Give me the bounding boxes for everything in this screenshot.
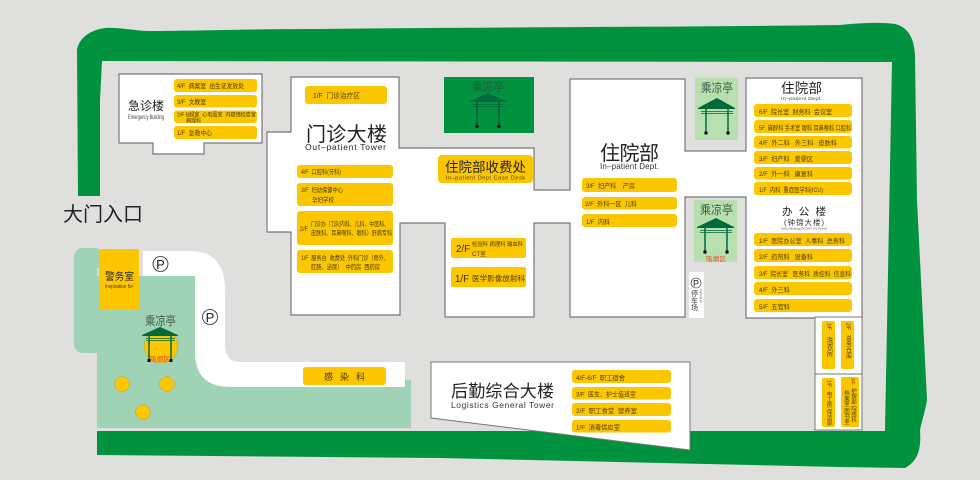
- panel: emergency building: Emergency Building: [128, 115, 164, 121]
- panel: infection department: [303, 367, 386, 385]
- lab and imaging floors: 1/F: [455, 274, 469, 285]
- panel: service rooms: 护理部 院感科: [850, 387, 857, 424]
- lab and imaging floors: 医学影像放射科: [472, 273, 526, 283]
- panel: parking sign: Parking lot: [699, 289, 703, 303]
- panel: infection department: 感 染 科: [324, 371, 365, 382]
- inpatient department: In–patient Dept.: [600, 162, 659, 171]
- outpatient tower: 肛肠、泌尿） 中药房 西药房: [311, 262, 380, 271]
- pavilion: lower light green with smoking area: 吸烟区: [706, 254, 727, 263]
- right inpatient department list: 4/F 外二科 外三科 皮肤科: [759, 138, 837, 147]
- right inpatient department list: [754, 81, 852, 195]
- panel: logistics general tower: 4/F-6/F 职工宿舍: [576, 373, 625, 382]
- office building list: 5/F 五官科: [759, 302, 790, 311]
- office building list: Office Building(ZHONG JIN Tower): [781, 226, 827, 230]
- panel: service rooms: 2/F: [844, 323, 850, 330]
- right inpatient department list: 6/F 院长室 财务科 会议室: [759, 107, 832, 116]
- outpatient tower: 3/F 妇幼保健中心: [301, 185, 343, 194]
- panel: service rooms: [815, 317, 862, 430]
- panel: logistics general tower: 后勤综合大楼: [451, 382, 554, 401]
- panel: parking sign: 停车场: [690, 289, 698, 312]
- right inpatient department list: 1/F 内科 重症医学科(ICU): [759, 185, 823, 194]
- panel: logistics general tower: 2/F 职工食堂 营养室: [576, 406, 637, 415]
- inpatient department: 住院部: [600, 142, 659, 165]
- lawn pavilion with smoking area: 乘凉亭: [145, 313, 176, 328]
- panel: parking sign: [689, 272, 704, 318]
- outpatient tower: [297, 86, 393, 273]
- right inpatient department list: 住院部: [781, 81, 822, 96]
- lab and imaging floors: 2/F: [456, 244, 470, 255]
- pavilion: dark green: [444, 77, 534, 133]
- office building list: 1/F 医院办公室 人事科 总务科: [759, 236, 845, 245]
- outpatient tower: 1/F 门诊治疗区: [313, 91, 360, 100]
- panel: emergency building: [119, 74, 262, 154]
- pavilion: lower light green with smoking area: [694, 200, 737, 263]
- panel: service rooms: 3/F: [850, 378, 856, 385]
- panel: logistics general tower: Logistics General Tower: [451, 400, 554, 410]
- office building list: 2/F 药剂科 设备科: [759, 252, 813, 261]
- heading: main entrance: 大门入口: [63, 203, 143, 226]
- outpatient tower: 4/F 口腔科(牙科): [301, 167, 341, 176]
- lawn circle 3: [136, 404, 150, 420]
- office building list: [754, 205, 852, 312]
- inpatient cashier desk: In–patient Dept Case Desk: [446, 176, 525, 182]
- panel: guard room: 警务室: [105, 270, 134, 283]
- lawn pavilion with smoking area: 吸烟区: [150, 354, 171, 363]
- outpatient tower: 2/F: [300, 227, 308, 233]
- inpatient department: 1/F 内科: [586, 217, 610, 226]
- panel: emergency building: 4/F 病案室 出生证发放处: [177, 81, 244, 90]
- pavilion: upper light green: [695, 78, 738, 140]
- outpatient tower: 1/F 服务台 收费处 外科门诊（骨外、: [301, 253, 389, 262]
- right inpatient department list: 3/F 妇产科 爱婴区: [759, 154, 813, 163]
- panel: emergency building: 3/F 文教室: [177, 97, 206, 106]
- outpatient tower: 孕妇学校: [312, 195, 334, 204]
- icon: parking 1: P: [156, 257, 165, 272]
- lab and imaging floors: [451, 238, 526, 287]
- pavilion: lower light green with smoking area: 乘凉亭: [700, 202, 733, 217]
- office building list: 4/F 外三科: [759, 285, 790, 294]
- icon: parking 2: [202, 310, 218, 325]
- panel: logistics general tower: [431, 362, 690, 450]
- panel: emergency building: 病理科: [186, 116, 201, 124]
- panel: main hospital building outline: [267, 77, 862, 318]
- outpatient tower: Out–patient Tower: [305, 142, 386, 152]
- panel: emergency building: 急诊楼: [128, 98, 164, 113]
- outpatient tower: 门诊大楼: [306, 123, 387, 146]
- inpatient department: 3/F 妇产科 产房: [586, 181, 635, 190]
- outpatient tower: 皮肤科、耳鼻喉科、眼科）肝病专科: [311, 228, 392, 237]
- panel: emergency building: 1/F 急救中心: [177, 128, 212, 137]
- panel: service rooms: 1/F: [826, 380, 832, 387]
- pavilion: upper light green: 乘凉亭: [701, 80, 733, 95]
- panel: parking sign: P: [693, 278, 699, 288]
- lab and imaging floors: CT室: [472, 250, 486, 258]
- panel: service rooms: 总务仓库: [844, 334, 852, 360]
- inpatient department: [582, 142, 677, 227]
- right inpatient department list: 2/F 外一科 康复科: [759, 169, 813, 178]
- panel: emergency building: 2/F B超室 心电图室 内窥镜检查室: [177, 110, 256, 118]
- panel: service rooms: 电工房 保洁部: [826, 390, 832, 427]
- campus road: [143, 251, 405, 387]
- inpatient cashier desk: [438, 155, 533, 183]
- panel: service rooms: 档案室 图书室: [843, 389, 850, 425]
- panel: service rooms: 洗衣房: [825, 336, 833, 358]
- panel: logistics general tower: 3/F 医生、护士值班室: [576, 390, 636, 398]
- office building list: 办 公 楼: [782, 205, 826, 218]
- inpatient department: 2/F 外科一区 儿科: [585, 199, 637, 208]
- right inpatient department list: In–patient Dept.: [781, 96, 822, 101]
- lawn circle 2: [160, 376, 174, 392]
- office building list: 3/F 院长室 医务科 质控科 信息科: [759, 269, 851, 278]
- lawn circle 1: [114, 376, 130, 392]
- lab and imaging floors: 检验科 病理科 输血科: [472, 240, 523, 248]
- icon: parking 2: P: [206, 310, 214, 325]
- lawn below road: [97, 276, 411, 428]
- outpatient tower: 门诊办 门诊(内科、儿科、中医科、: [311, 219, 389, 228]
- lawn area: [74, 248, 411, 428]
- right inpatient department list: 5F 麻醉科 手术室 眼科 耳鼻喉科 口腔科: [759, 123, 851, 132]
- pavilion: dark green: 乘凉亭: [472, 79, 504, 94]
- lawn pavilion with smoking area: [142, 313, 178, 363]
- panel: service rooms: 1/F: [826, 323, 832, 330]
- panel: guard room: [99, 249, 139, 310]
- icon: parking 1: [153, 256, 168, 272]
- inpatient cashier desk: 住院部收费处: [445, 160, 526, 175]
- panel: guard room: Inspiration for: [105, 284, 133, 290]
- panel: logistics general tower: 1/F 消毒供应室: [576, 422, 620, 432]
- office building list: (钟锦大楼): [784, 217, 824, 227]
